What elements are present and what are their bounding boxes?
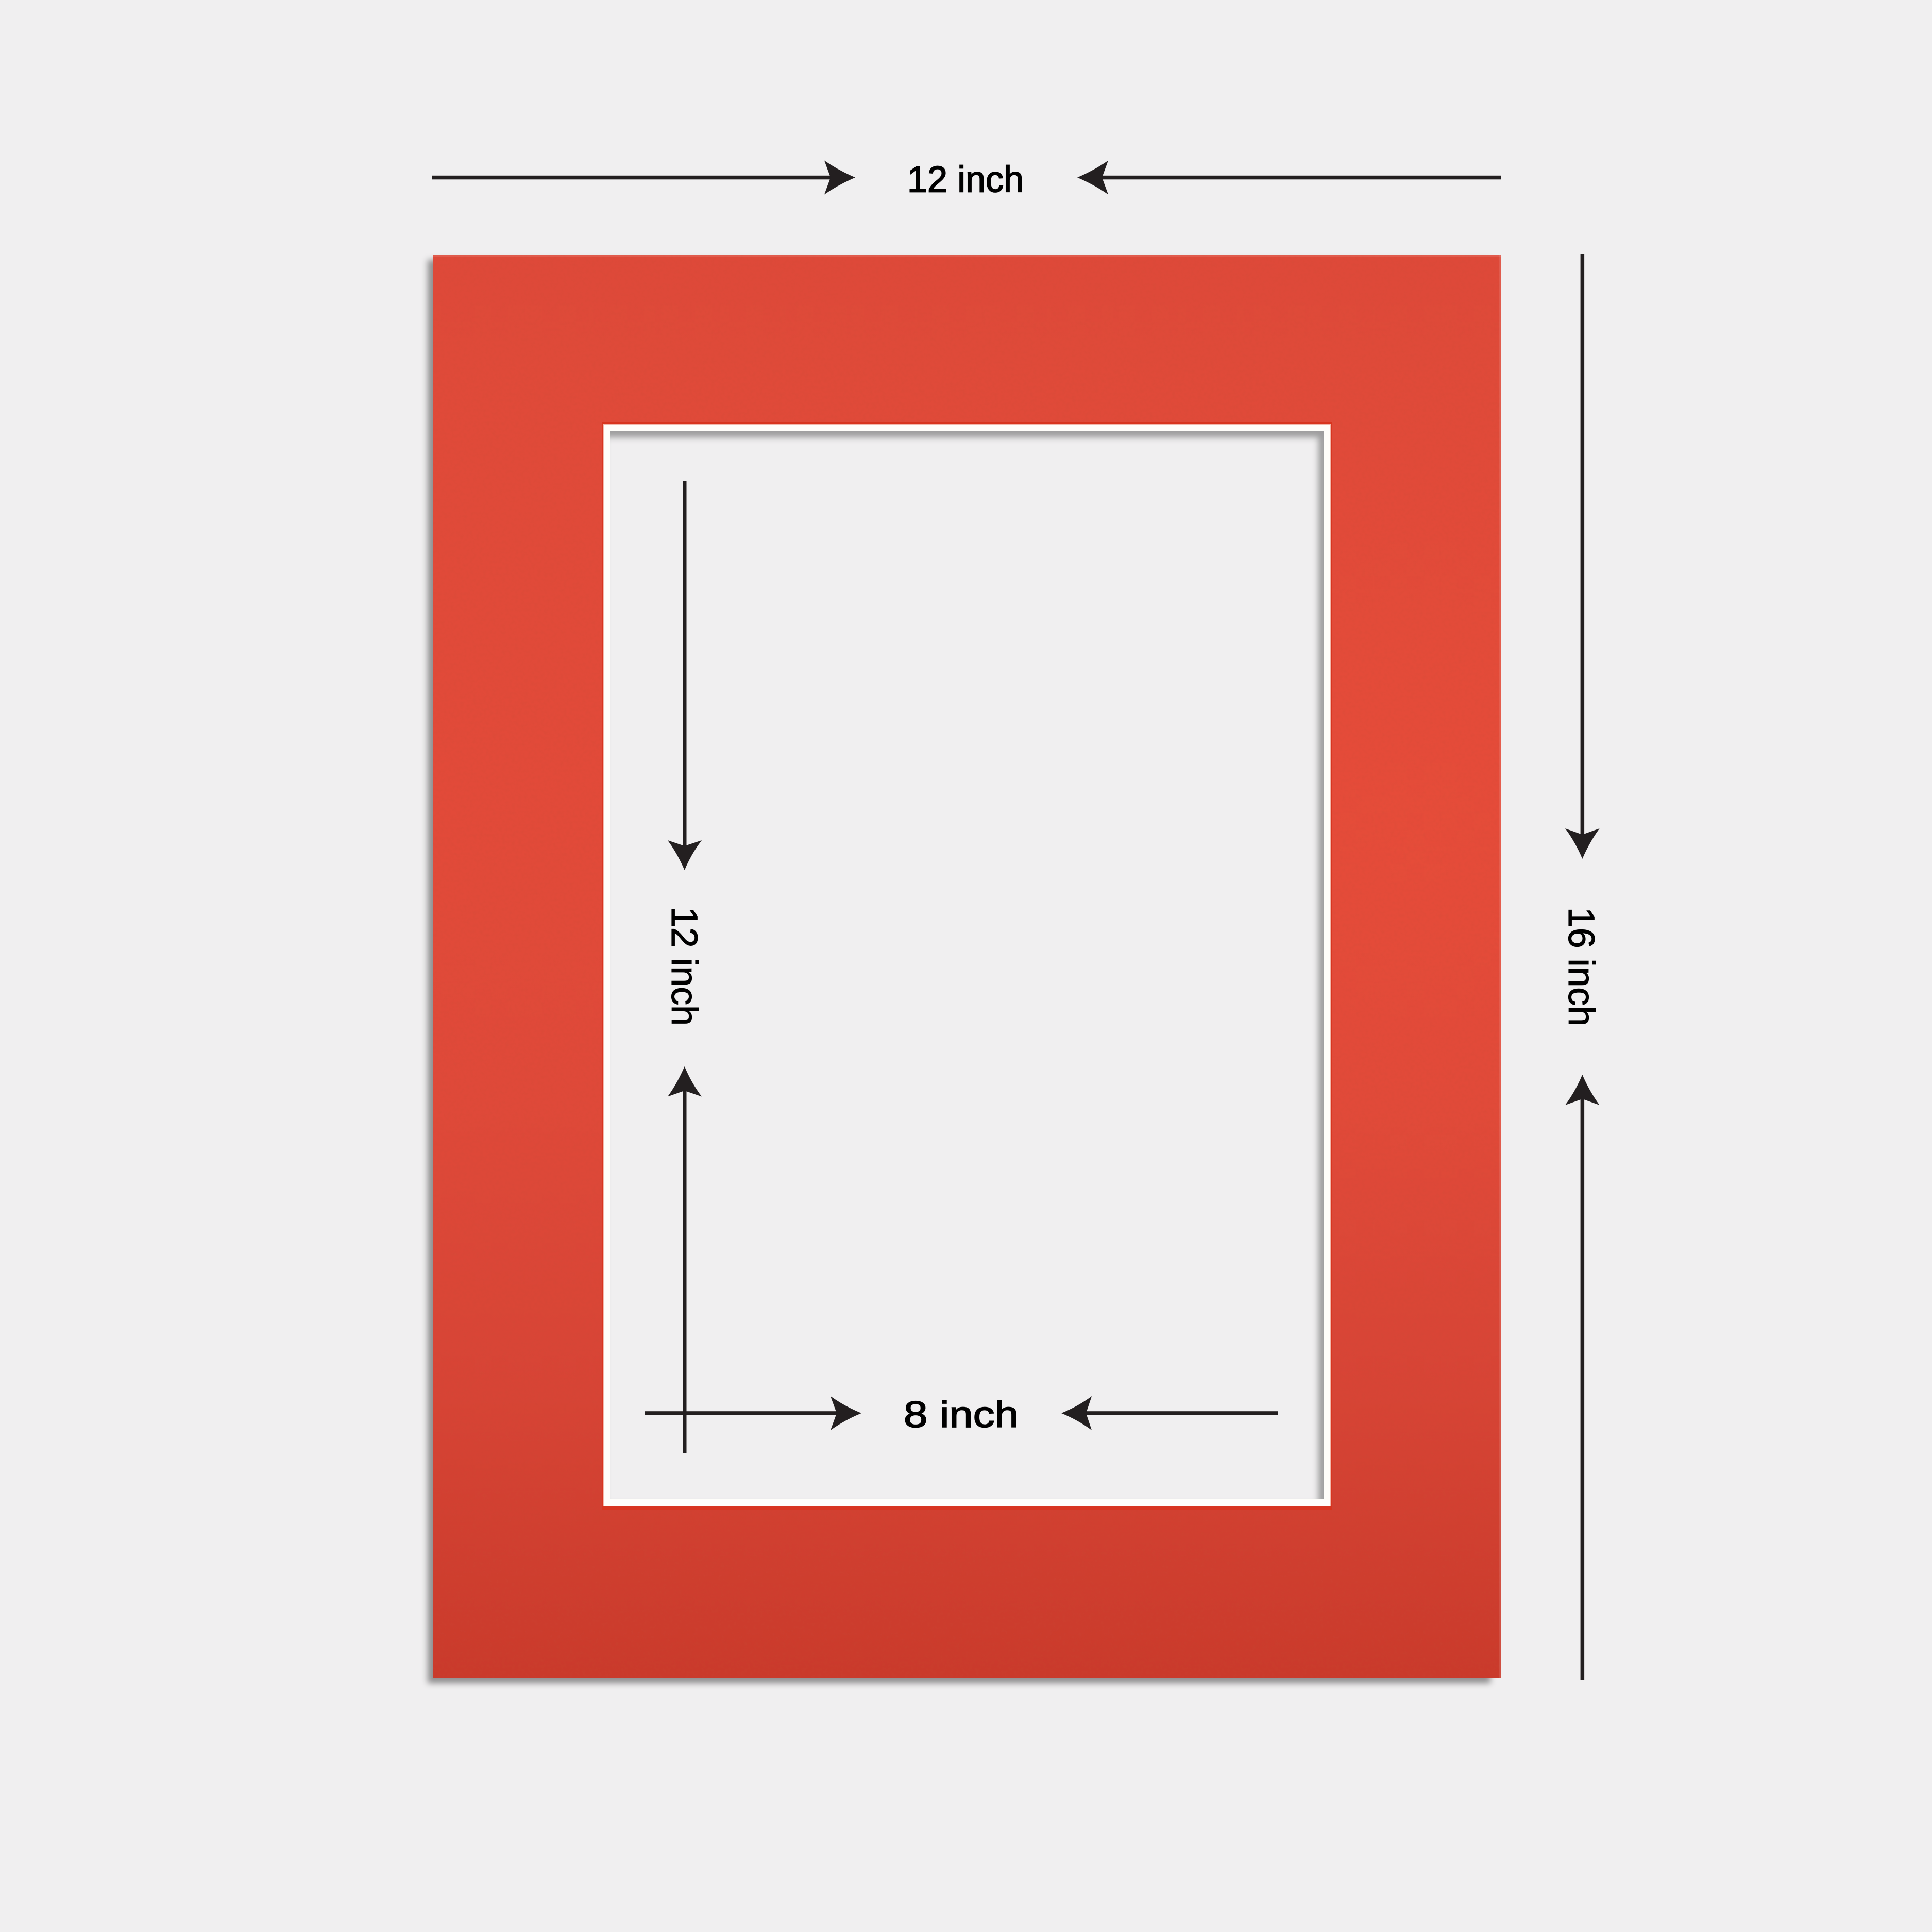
- mat drop shadow: [428, 260, 1490, 1683]
- label: inner width 8 inch: 8 inch: [904, 1395, 1019, 1435]
- mat board: [433, 255, 1501, 1678]
- arrow: inner height top: [668, 481, 702, 870]
- panel: red photo mat: [428, 255, 1501, 1683]
- inner window shadow: [610, 431, 1324, 1499]
- label: outer width 12 inch: 12 inch: [907, 160, 1024, 200]
- arrow: outer height top: [1565, 254, 1600, 859]
- arrow: outer width left: [432, 161, 855, 195]
- arrow: inner width right: [1061, 1396, 1278, 1430]
- arrow: outer height bottom: [1565, 1075, 1600, 1680]
- window cut-out with white bevel: [602, 422, 1332, 1510]
- label: inner height 12 inch: 12 inch: [664, 907, 704, 1026]
- arrow: inner height bottom: [668, 1066, 702, 1453]
- arrow: inner width left: [645, 1396, 861, 1430]
- arrow: outer width right: [1077, 161, 1501, 195]
- label: outer height 16 inch: 16 inch: [1561, 907, 1601, 1026]
